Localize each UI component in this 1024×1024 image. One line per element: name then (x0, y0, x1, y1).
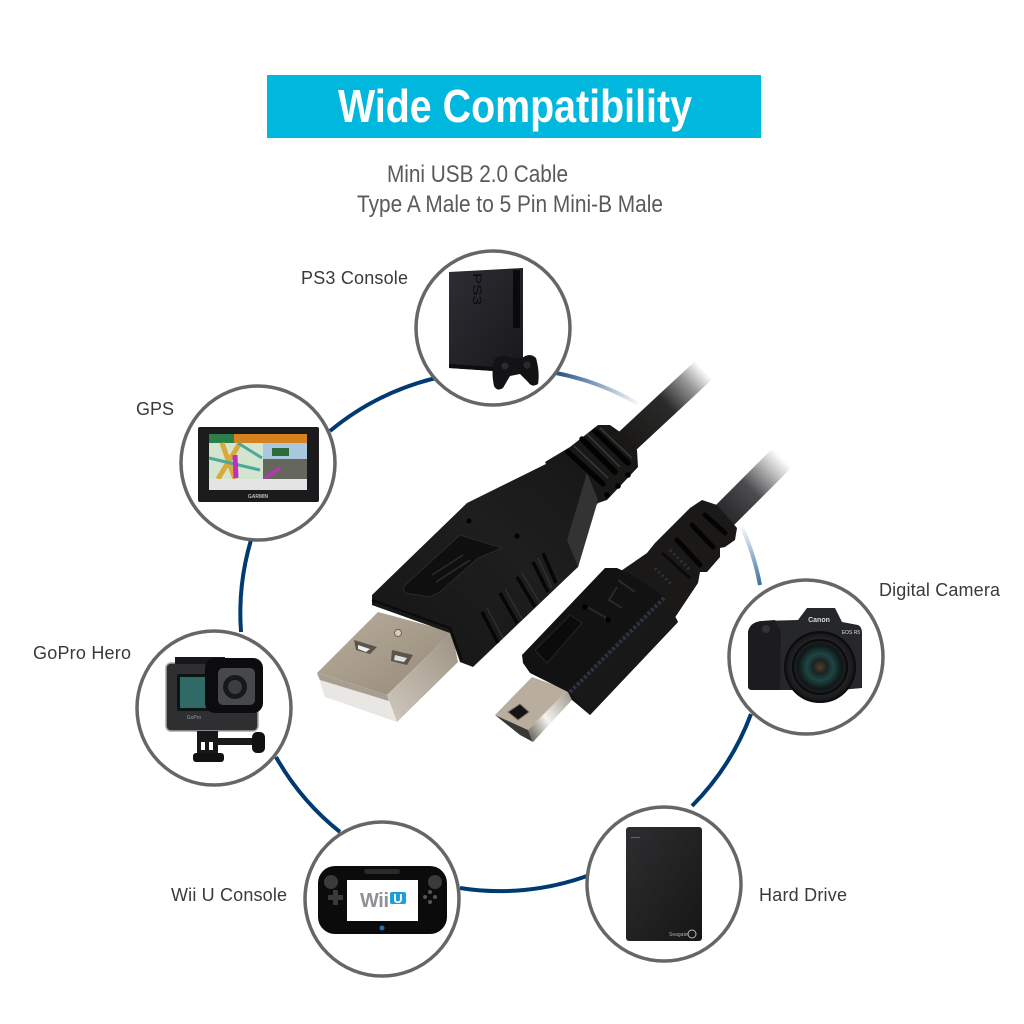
panel: wii u console (305, 822, 459, 976)
icon: ps3 console: PS3 (470, 273, 484, 305)
panel: hard drive (587, 807, 741, 961)
icon: wii u gamepad (318, 866, 447, 934)
mini-b body (522, 568, 678, 715)
icon: wii u gamepad: U (393, 891, 403, 906)
panel: gps (181, 386, 335, 540)
label: hard drive: Hard Drive (759, 885, 847, 905)
label: gopro hero: GoPro Hero (33, 643, 131, 663)
icon: hard drive (626, 827, 702, 941)
connecting ring (240, 373, 760, 891)
icon: gopro camera (166, 657, 265, 762)
label: wii u console: Wii U Console (171, 885, 287, 905)
mini-b strain relief (615, 500, 737, 625)
usb-a body (372, 463, 598, 667)
subtitle (357, 161, 663, 218)
subtitle: Mini USB 2.0 Cable (387, 161, 568, 188)
panel: digital camera (729, 580, 883, 734)
label: gps: GPS (136, 399, 174, 419)
panel: gopro hero (137, 631, 291, 785)
icon: ps3 console (449, 268, 539, 390)
title banner: Wide Compatibility (338, 80, 692, 132)
icon: digital camera: EOS R5 (842, 630, 860, 636)
usb-a strain relief (545, 425, 638, 520)
icon: gps device: GARMIN (248, 494, 269, 500)
usb cables and connectors (317, 368, 784, 742)
subtitle: Type A Male to 5 Pin Mini-B Male (357, 191, 663, 218)
icon: wii u gamepad: Wii (360, 890, 389, 912)
mini-b cable (720, 456, 784, 520)
usb-a cable (622, 368, 706, 446)
panel: ps3 console (416, 251, 570, 405)
label: digital camera: Digital Camera (879, 580, 1001, 600)
label: ps3 console: PS3 Console (301, 268, 408, 288)
icon: hard drive: Seagate (669, 932, 688, 938)
icon: gopro camera: GoPro (187, 715, 201, 721)
icon: digital camera: Canon (808, 617, 830, 624)
icon: digital camera (748, 608, 862, 702)
usb-a metal plug (317, 612, 458, 722)
mini-b metal plug (495, 677, 572, 742)
title banner (267, 75, 761, 138)
icon: gps device (198, 427, 319, 502)
